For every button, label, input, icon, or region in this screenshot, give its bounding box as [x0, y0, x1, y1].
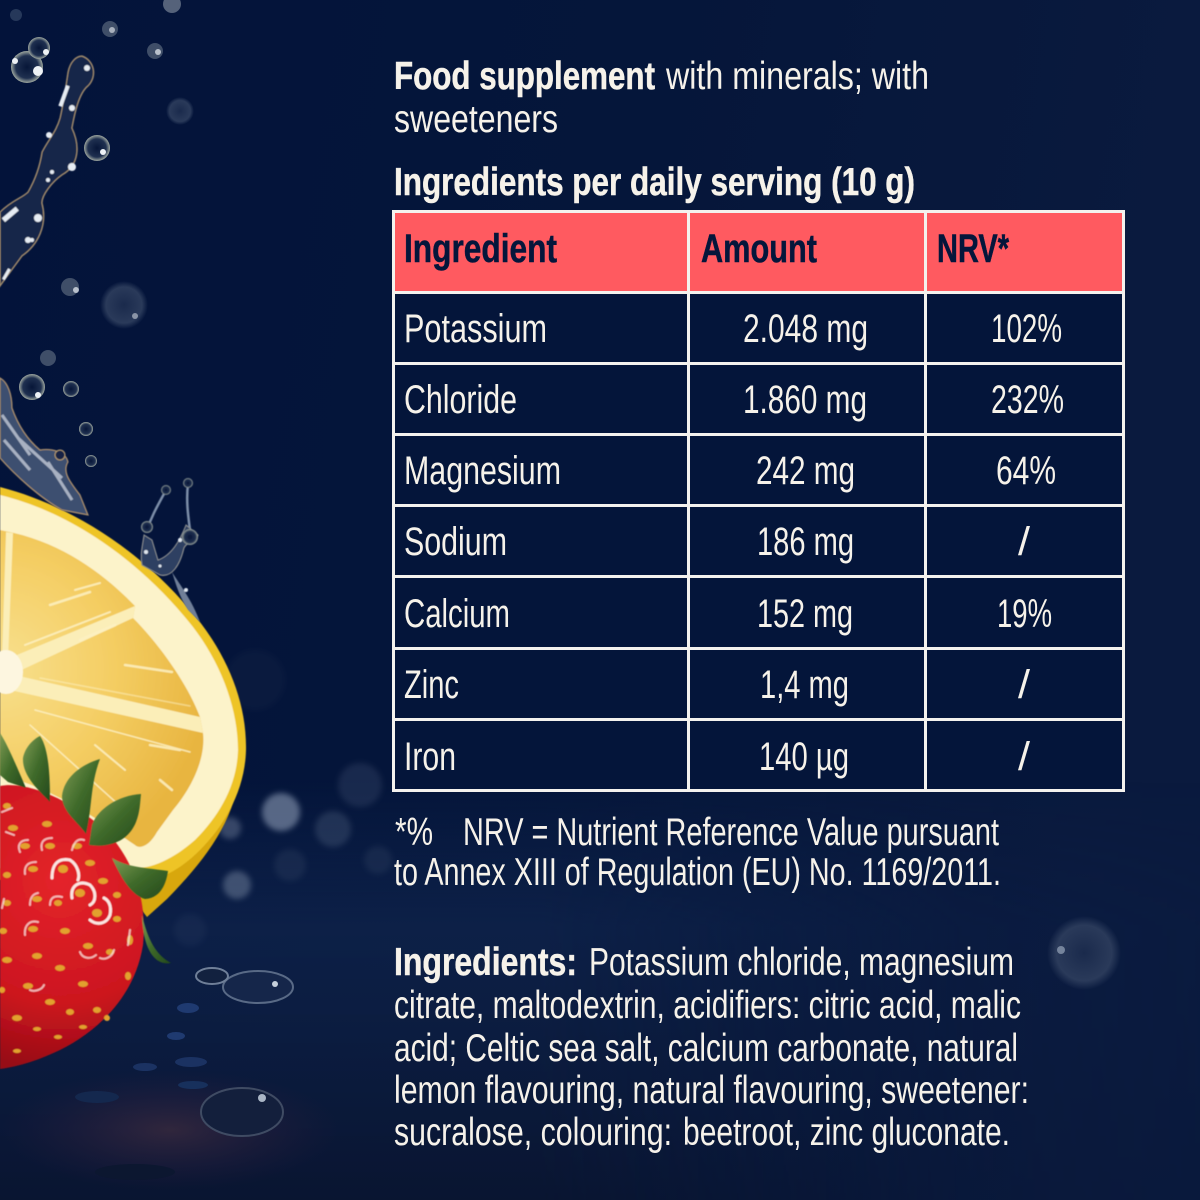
heading: product description: [394, 55, 929, 141]
lemon flesh: [0, 530, 203, 847]
lemon pith: [0, 495, 238, 869]
ingredients list: [394, 941, 1029, 1154]
row: sodium: /: [1018, 520, 1031, 564]
footnote: [394, 811, 1001, 894]
ingredients list: sucralose, colouring:: [394, 1111, 672, 1154]
leaf 2: [23, 736, 50, 802]
strawberry leaves: [0, 733, 171, 963]
row: iron: Iron: [404, 735, 456, 779]
table header row: Amount: [701, 227, 817, 271]
table header row: Ingredient: [404, 227, 557, 271]
heading: product description: Food supplement: [394, 55, 655, 98]
table background: [394, 212, 1124, 791]
row: calcium: Calcium: [404, 592, 510, 636]
floating droplets: [10, 0, 1121, 990]
heading: product description: with minerals; with: [665, 55, 929, 98]
strawberry highlights: [2, 808, 130, 991]
ingredients list: acid; Celtic sea salt, calcium carbonate, natural: [394, 1027, 1018, 1070]
row: zinc: 1,4 mg: [760, 663, 849, 707]
row: potassium: 102%: [991, 307, 1062, 351]
strawberry body: [0, 785, 144, 1069]
water splash near lemon: [141, 478, 200, 622]
strawberry seeds: [0, 803, 133, 1053]
row: chloride: [404, 378, 1064, 422]
water splash lower: [0, 378, 88, 515]
row: chloride: 232%: [991, 378, 1064, 422]
lemon underside peel: [125, 775, 240, 917]
row: zinc: /: [1018, 663, 1031, 707]
row: potassium: [404, 307, 1062, 351]
table header row: NRV*: [937, 227, 1009, 271]
leaf 4: [89, 794, 141, 846]
footnote: *%: [395, 811, 433, 854]
heading: ingredients per daily serving: Ingredients per daily serving (10 g): [394, 161, 915, 204]
row: magnesium: 242 mg: [756, 449, 855, 493]
lemon core: [0, 650, 23, 694]
row: calcium: 152 mg: [757, 592, 853, 636]
lemon segment membranes: [0, 532, 203, 733]
row: potassium: Potassium: [404, 307, 547, 351]
lemon peel: [0, 487, 246, 881]
leaf 3: [62, 759, 100, 834]
ingredients list: lemon flavouring, natural flavouring, sweetener:: [394, 1069, 1029, 1112]
row: potassium: 2.048 mg: [743, 307, 868, 351]
large droplet right: [1047, 916, 1121, 990]
lemon half: [0, 487, 246, 917]
row: sodium: [404, 520, 1031, 564]
strawberry: [0, 733, 171, 1069]
row: sodium: 186 mg: [757, 520, 854, 564]
footnote: NRV = Nutrient Reference Value pursuant: [463, 811, 999, 854]
leaf 1: [0, 733, 26, 788]
background: [0, 869, 766, 1200]
footnote: to Annex XIII of Regulation (EU) No. 1169/2011.: [394, 851, 1001, 894]
row: chloride: 1.860 mg: [743, 378, 867, 422]
lemon flesh texture: [25, 583, 190, 815]
table header row: [394, 212, 1124, 292]
droplet highlights: [12, 27, 161, 398]
row: zinc: Zinc: [404, 663, 459, 707]
ingredients list: citrate, maltodextrin, acidifiers: citric acid, malic: [394, 984, 1021, 1027]
row: calcium: 19%: [997, 592, 1052, 636]
row: sodium: Sodium: [404, 520, 507, 564]
table grid lines: [393, 211, 1124, 791]
row: iron: 140 µg: [759, 735, 849, 779]
row: chloride: Chloride: [404, 378, 517, 422]
row: magnesium: 64%: [996, 449, 1056, 493]
water splash upper: [0, 56, 94, 286]
splash highlights: [2, 65, 90, 280]
leaf 6: [142, 915, 171, 963]
ingredients list: Potassium chloride, magnesium: [589, 941, 1014, 984]
row: magnesium: [404, 449, 1056, 493]
row: iron: /: [1018, 735, 1031, 779]
ingredients list: beetroot, zinc gluconate.: [683, 1111, 1010, 1154]
heading: product description: sweeteners: [394, 98, 558, 141]
leaf 5: [112, 858, 168, 899]
bokeh lights: [174, 650, 392, 946]
surface water drops: [75, 968, 293, 1180]
row: iron: [404, 735, 1031, 779]
ingredients list: Ingredients:: [394, 941, 577, 984]
row: magnesium: Magnesium: [404, 449, 561, 493]
row: zinc: [404, 663, 1031, 707]
row: calcium: [404, 592, 1052, 636]
nutrition table: [393, 211, 1124, 791]
